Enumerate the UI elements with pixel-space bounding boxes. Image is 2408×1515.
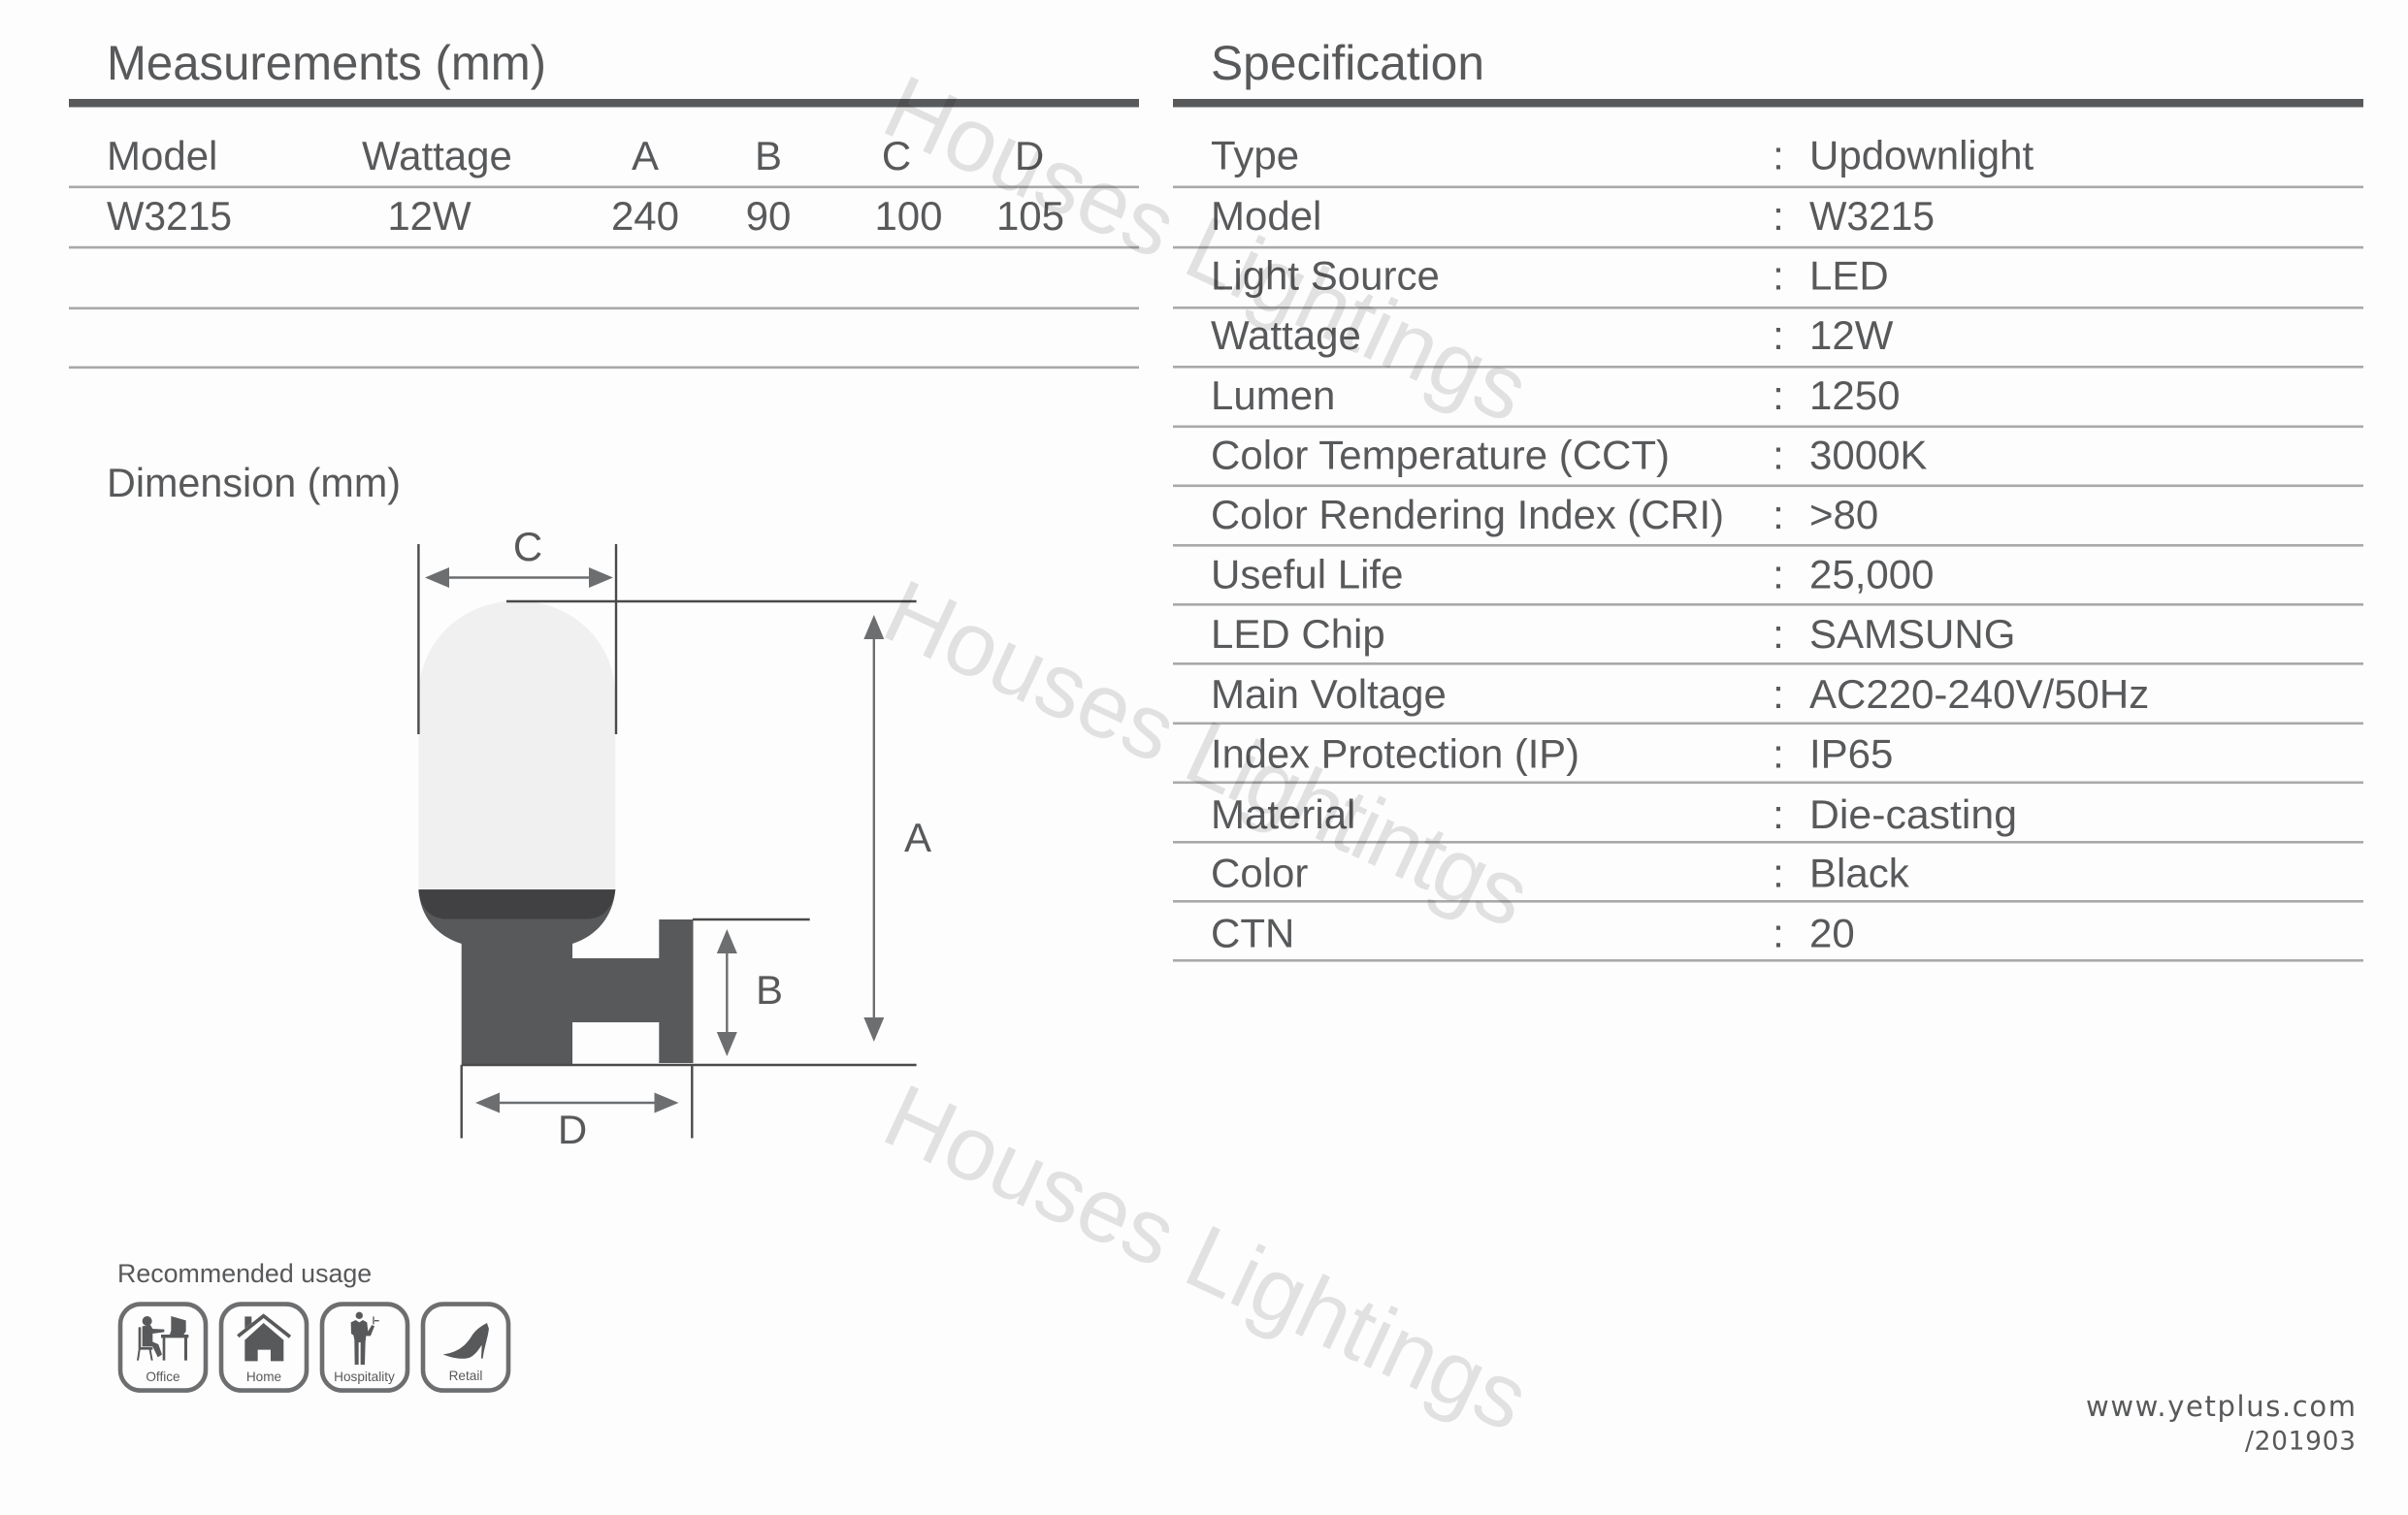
table data row: W3215: W3215 [107, 193, 232, 239]
specification colons: : [1773, 851, 1784, 896]
specification colons: : [1773, 432, 1784, 477]
heading rule [69, 99, 1139, 107]
specification colons: : [1773, 492, 1784, 537]
specification row labels: Lumen [1211, 372, 1335, 418]
watermark: Houses Lightintgs (middle): Houses Lightintgs [870, 560, 1543, 946]
specification row values: 1250 [1809, 372, 1900, 418]
icon: retail: Retail [449, 1369, 482, 1383]
table data row: W3215: 12W [387, 193, 472, 239]
table data row: W3215: 105 [996, 193, 1064, 239]
specification colons: : [1773, 671, 1784, 717]
footer: website and date code: www.yetplus.com [2086, 1390, 2356, 1423]
table header row [107, 133, 1044, 178]
specification row values: >80 [1809, 492, 1878, 537]
lamp globe [418, 601, 615, 890]
lamp dark band [418, 890, 615, 919]
specification heading rule [1173, 99, 2363, 107]
specification row labels: Color Rendering Index (CRI) [1211, 492, 1724, 537]
specification row labels: Useful Life [1211, 552, 1403, 597]
specification row labels: CTN [1211, 910, 1294, 955]
specification row values: SAMSUNG [1809, 611, 2015, 657]
specification row values: W3215 [1809, 193, 1935, 239]
table header row: A [632, 133, 659, 178]
icon: home: Home [246, 1370, 281, 1384]
specification row labels: LED Chip [1211, 611, 1385, 657]
lamp drawing [418, 601, 693, 1065]
specification row values: Updownlight [1809, 132, 2034, 178]
dimension D: D [558, 1107, 587, 1152]
table data row: W3215 [107, 193, 1064, 239]
specification colons: : [1773, 193, 1784, 239]
specification colons: : [1773, 611, 1784, 657]
specification row values: 12W [1809, 312, 1894, 358]
dimension B [693, 919, 810, 1056]
table data row: W3215: 100 [874, 193, 943, 239]
dimension A: A [904, 815, 931, 860]
panel: measurements table [69, 36, 1139, 369]
footer: website and date code [2086, 1390, 2356, 1457]
specification row labels: Color [1211, 851, 1308, 896]
specification colons: : [1773, 372, 1784, 418]
icon: retail [423, 1305, 508, 1391]
specification colons: : [1773, 791, 1784, 837]
specification colons [1773, 132, 1784, 955]
specification row labels: Model [1211, 193, 1321, 239]
table header row: C [882, 133, 911, 178]
specification row values: Die-casting [1809, 791, 2017, 837]
specification row values: 3000K [1809, 432, 1927, 477]
table header row: Wattage [362, 133, 512, 178]
specification row labels: Main Voltage [1211, 671, 1447, 717]
panel: recommended usage [117, 1259, 508, 1391]
specification row labels: Wattage [1211, 312, 1361, 358]
table header row: D [1015, 133, 1044, 178]
specification row values: AC220-240V/50Hz [1809, 671, 2149, 717]
dimension A [462, 601, 931, 1065]
heading: specification: Specification [1211, 36, 1484, 90]
specification row labels: Material [1211, 791, 1355, 837]
specification colons: : [1773, 552, 1784, 597]
specification row values: IP65 [1809, 730, 1893, 776]
table header row: Model [107, 133, 217, 178]
dimension B: B [756, 967, 783, 1013]
icon: office [120, 1305, 206, 1391]
specification row labels: Type [1211, 132, 1299, 178]
panel: specification table [1173, 36, 2363, 962]
icon: hospitality: Hospitality [334, 1370, 395, 1384]
table header row: B [755, 133, 782, 178]
specification row values: 20 [1809, 910, 1855, 955]
watermark: Houses Lightings (top): Houses Lightings [870, 55, 1544, 441]
footer: website and date code: /201903 [2245, 1426, 2356, 1457]
specification row labels: Index Protection (IP) [1211, 730, 1579, 776]
specification row labels [1211, 132, 1724, 955]
specification row values: LED [1809, 253, 1889, 299]
specification colons: : [1773, 910, 1784, 955]
icon: office: Office [146, 1370, 180, 1384]
specification row values: 25,000 [1809, 552, 1934, 597]
icon: hospitality [322, 1305, 407, 1391]
lamp body and wall bracket [418, 889, 693, 1065]
specification row values: Black [1809, 851, 1910, 896]
specification colons: : [1773, 730, 1784, 776]
dimension diagram [418, 524, 931, 1152]
watermark: Houses Lightings (bottom): Houses Lightings [870, 1064, 1544, 1450]
specification row values [1809, 132, 2149, 955]
specification colons: : [1773, 312, 1784, 358]
dimension C: C [513, 524, 542, 569]
table data row: W3215: 90 [746, 193, 791, 239]
table data row: W3215: 240 [611, 193, 679, 239]
heading: measurements: Measurements (mm) [107, 36, 546, 90]
heading: recommended usage: Recommended usage [117, 1259, 372, 1288]
icon: home [221, 1305, 307, 1391]
specification row labels: Light Source [1211, 253, 1440, 299]
dimension C [418, 524, 616, 734]
heading: dimension: Dimension (mm) [107, 460, 401, 505]
specification row labels: Color Temperature (CCT) [1211, 432, 1670, 477]
specification colons: : [1773, 132, 1784, 178]
specification colons: : [1773, 253, 1784, 299]
dimension D [462, 1065, 692, 1152]
